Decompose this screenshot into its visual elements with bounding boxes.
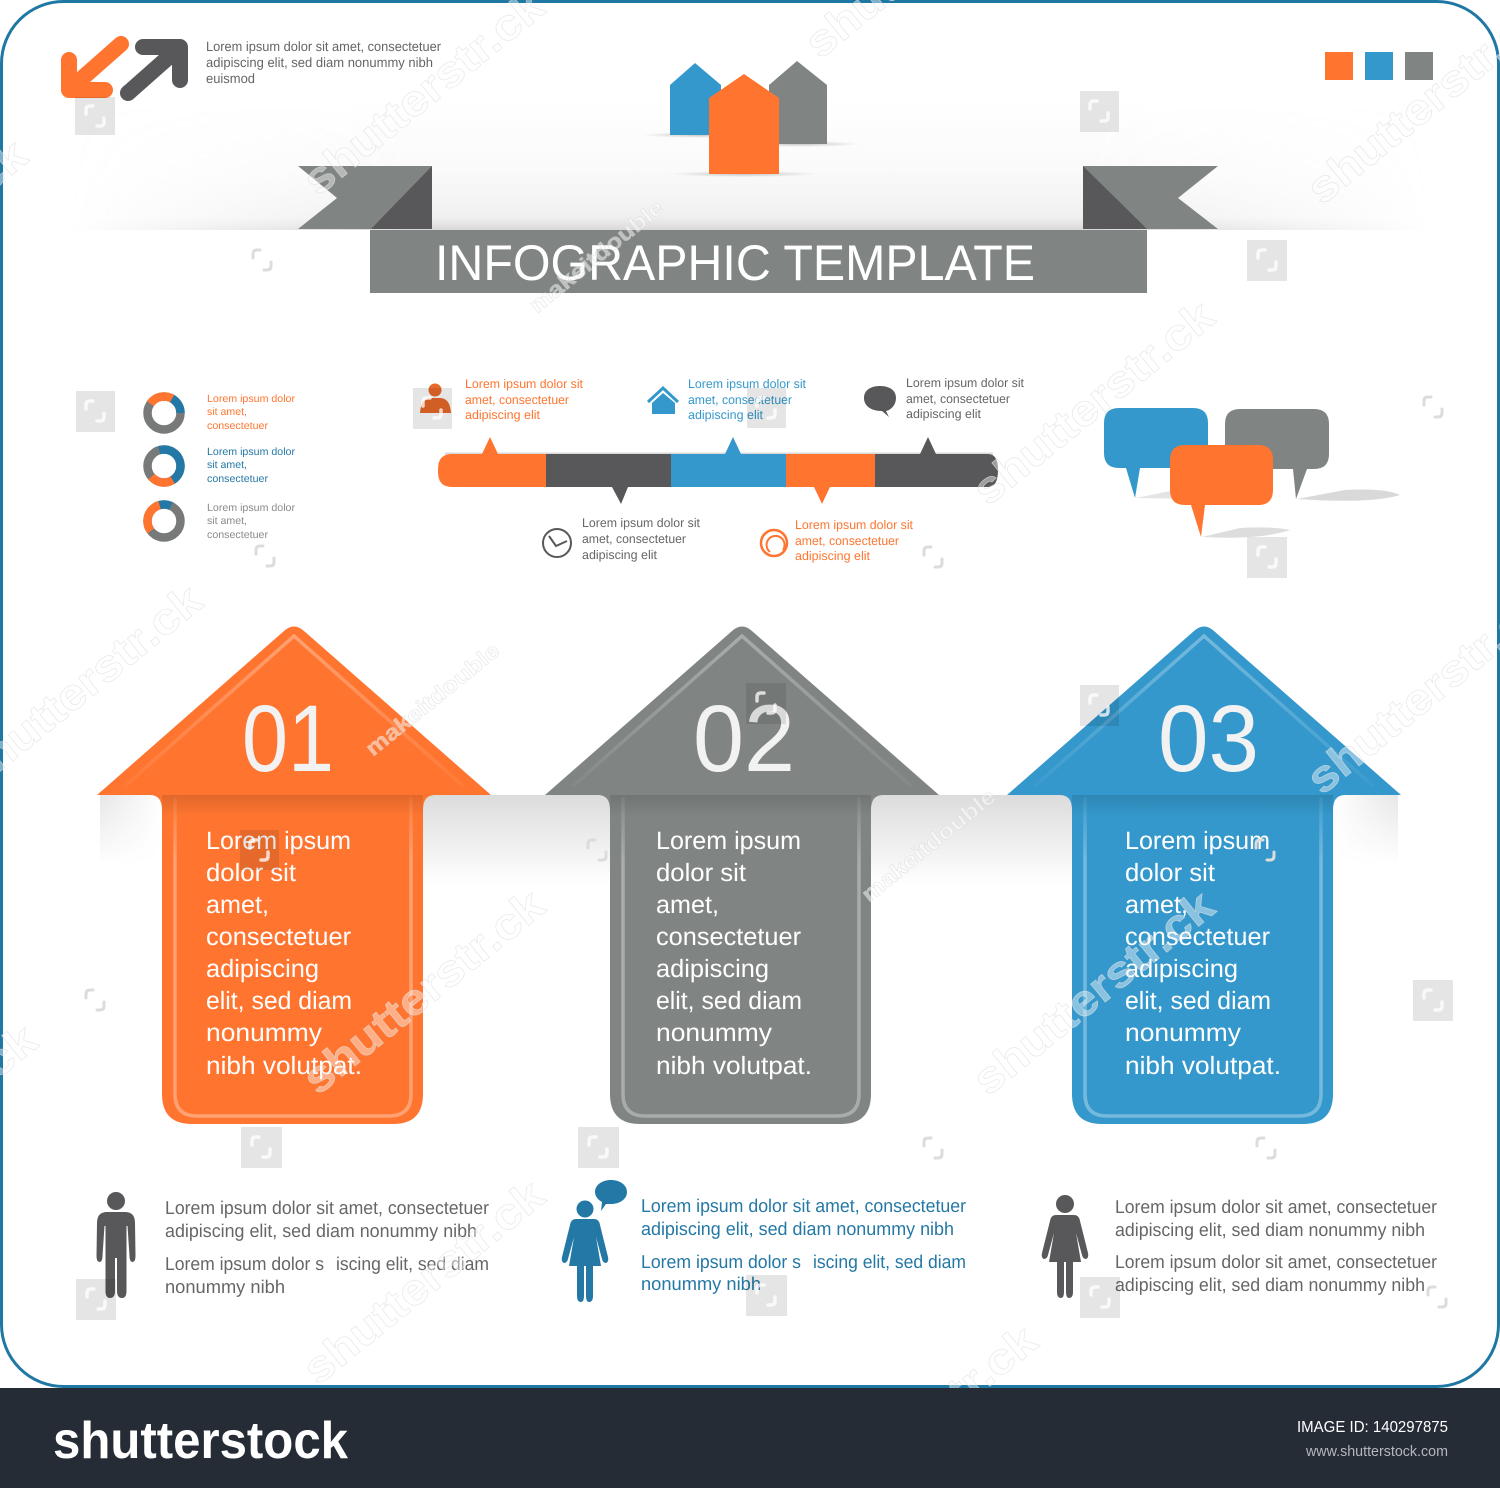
man text: nonummy nibh <box>165 1276 285 1297</box>
intro text: adipiscing elit, sed diam nonummy nibh <box>206 55 433 70</box>
item text <box>465 377 584 422</box>
panel: arrow 03 <box>1007 626 1401 1124</box>
woman text: adipiscing elit, sed diam nonummy nibh <box>641 1218 954 1239</box>
arrow 03 body text: nibh volutpat. <box>1125 1052 1281 1080</box>
website: www.shutterstock.com <box>1305 1444 1448 1460</box>
woman text <box>641 1195 966 1294</box>
woman text <box>1115 1196 1437 1295</box>
item text: adipiscing elit <box>688 408 764 422</box>
woman text: Lorem ipsum dolor sit amet, consectetuer <box>641 1195 966 1216</box>
speech bubbles <box>1104 408 1400 538</box>
donut 3 label: consectetuer <box>207 529 269 541</box>
footer bar <box>0 1388 1500 1488</box>
arrow 02 body text: nibh volutpat. <box>656 1052 812 1080</box>
item text: adipiscing elit <box>906 407 982 421</box>
item text <box>795 518 914 563</box>
arrow 01 body text: Lorem ipsum <box>206 827 351 855</box>
image id: IMAGE ID: 140297875 <box>1297 1419 1448 1436</box>
man text: iscing elit, sed diam <box>336 1253 489 1274</box>
donut 1 label <box>207 393 296 432</box>
arrow 02 body text: nonummy <box>656 1019 773 1047</box>
item text: adipiscing elit <box>582 548 658 562</box>
item text: amet, consectetuer <box>795 534 899 548</box>
icon: home <box>648 388 678 414</box>
arrow 01 body text: elit, sed diam <box>206 987 352 1015</box>
arrow 02 body text: elit, sed diam <box>656 987 802 1015</box>
arrow 01 body text: dolor sit <box>206 859 296 887</box>
arrow 03 body text <box>1125 827 1281 1080</box>
arrow 02 body text: amet, <box>656 891 719 919</box>
woman text: Lorem ipsum dolor sit amet, consectetuer <box>1115 1196 1437 1217</box>
icon: woman <box>1042 1195 1088 1298</box>
watermark overlay: shutterstr.ck <box>963 291 1224 515</box>
watermark overlay: makeitdouble <box>856 784 1000 907</box>
arrow 03 body text: dolor sit <box>1125 859 1215 887</box>
number 03: 03 <box>1158 686 1259 792</box>
timeline item: orange person <box>420 377 584 422</box>
arrow 01 body text: consectetuer <box>206 923 351 951</box>
arrow 02 body text: dolor sit <box>656 859 746 887</box>
item text: Lorem ipsum dolor sit <box>582 516 701 530</box>
icon: double arrows <box>69 44 180 93</box>
intro text: euismod <box>206 71 255 86</box>
timeline item: blue home <box>648 377 807 422</box>
footer logo: shutterstock <box>53 1412 348 1470</box>
timeline pointers <box>482 437 936 504</box>
item text: Lorem ipsum dolor sit <box>906 376 1025 390</box>
arrow 03 body text: elit, sed diam <box>1125 987 1271 1015</box>
arrow 02 body text: Lorem ipsum <box>656 827 801 855</box>
donut 2 label: Lorem ipsum dolor <box>207 446 296 458</box>
watermark overlay: shutterstr.ck <box>293 1170 554 1394</box>
item text: amet, consectetuer <box>688 393 792 407</box>
arrow 01 body text: nibh volutpat. <box>206 1052 362 1080</box>
item text: adipiscing elit <box>795 549 871 563</box>
man text: Lorem ipsum dolor s <box>165 1253 324 1274</box>
donut 2 label <box>207 446 296 485</box>
title ribbon <box>298 166 1218 293</box>
arrow 01 body text: amet, <box>206 891 269 919</box>
item text: adipiscing elit <box>465 408 541 422</box>
icon: clock <box>543 529 571 557</box>
arrow 03 body text: consectetuer <box>1125 923 1270 951</box>
panel: arrow 02 <box>545 626 939 1124</box>
woman text: nonummy nibh <box>641 1273 761 1294</box>
watermark overlay: shutterstr.ck <box>963 881 1224 1105</box>
timeline bar <box>438 437 998 504</box>
man text: adipiscing elit, sed diam nonummy nibh <box>165 1220 477 1241</box>
intro text: Lorem ipsum dolor sit amet, consectetuer <box>206 39 441 54</box>
woman text: adipiscing elit, sed diam nonummy nibh <box>1115 1219 1425 1240</box>
icon: three houses <box>642 61 860 177</box>
donut 2 label: sit amet, <box>207 459 247 471</box>
watermark overlay: makeitdouble <box>524 195 668 318</box>
woman text: adipiscing elit, sed diam nonummy nibh <box>1115 1274 1425 1295</box>
icon: woman and bubble <box>562 1180 627 1302</box>
arrow 01 body text <box>206 827 362 1080</box>
item text <box>582 516 701 562</box>
donut 3 label: sit amet, <box>207 515 247 527</box>
woman text: Lorem ipsum dolor sit amet, consectetuer <box>1115 1251 1437 1272</box>
legend colour squares <box>1325 52 1433 80</box>
donut 3 label <box>207 502 296 541</box>
woman text: iscing elit, sed diam <box>813 1251 966 1272</box>
icon: chat bubble <box>864 386 896 417</box>
donut 2 label: consectetuer <box>207 473 269 485</box>
donut legend <box>141 390 296 544</box>
donut 3 <box>141 498 187 544</box>
timeline item: clock <box>543 516 701 562</box>
man text <box>165 1197 489 1297</box>
arrow 02 body text <box>656 827 812 1080</box>
title: INFOGRAPHIC TEMPLATE <box>435 235 1035 291</box>
item text: amet, consectetuer <box>906 392 1010 406</box>
donut 1 label: consectetuer <box>207 420 269 432</box>
icon: man <box>96 1192 136 1298</box>
donut 1 <box>141 390 187 436</box>
shadows behind arrows <box>100 795 1398 864</box>
number 01: 01 <box>242 686 334 792</box>
intro text <box>206 39 441 86</box>
arrow 03 body text: nonummy <box>1125 1019 1242 1047</box>
arrow 02 body text: consectetuer <box>656 923 801 951</box>
donut 1 label: Lorem ipsum dolor <box>207 393 296 405</box>
panel: arrow 01 <box>97 626 491 1124</box>
item text: Lorem ipsum dolor sit <box>688 377 807 391</box>
icon: rings <box>761 530 787 556</box>
icon: person <box>420 384 451 413</box>
number 02: 02 <box>693 686 795 792</box>
arrow 03 body text: adipiscing <box>1125 955 1238 983</box>
arrow 02 body text: adipiscing <box>656 955 769 983</box>
woman text: Lorem ipsum dolor s <box>641 1251 801 1272</box>
timeline item: orange rings <box>761 518 914 563</box>
item text <box>906 376 1025 421</box>
item text: amet, consectetuer <box>582 532 686 546</box>
item text <box>688 377 807 422</box>
timeline item: dark chat <box>864 376 1025 421</box>
bottom block: man <box>96 1192 489 1298</box>
arrow 01 body text: adipiscing <box>206 955 319 983</box>
item text: Lorem ipsum dolor sit <box>465 377 584 391</box>
item text: amet, consectetuer <box>465 393 569 407</box>
arrow 03 body text: amet, <box>1125 891 1188 919</box>
man text: Lorem ipsum dolor sit amet, consectetuer <box>165 1197 489 1218</box>
donut 2 <box>141 443 187 489</box>
watermark overlay: makeitdouble <box>360 638 504 761</box>
arrow 03 body text: Lorem ipsum <box>1125 827 1270 855</box>
item text: Lorem ipsum dolor sit <box>795 518 914 532</box>
donut 3 label: Lorem ipsum dolor <box>207 502 296 514</box>
watermark overlay: shutterstr.ck <box>293 880 554 1104</box>
ribbon backdrop shadow <box>144 184 1357 230</box>
bottom block: woman with speech bubble <box>562 1180 966 1302</box>
watermark overlay: shutterstr.ck <box>293 0 554 205</box>
donut 1 label: sit amet, <box>207 406 247 418</box>
arrow 01 body text: nonummy <box>206 1019 323 1047</box>
bottom block: woman <box>1042 1195 1437 1298</box>
